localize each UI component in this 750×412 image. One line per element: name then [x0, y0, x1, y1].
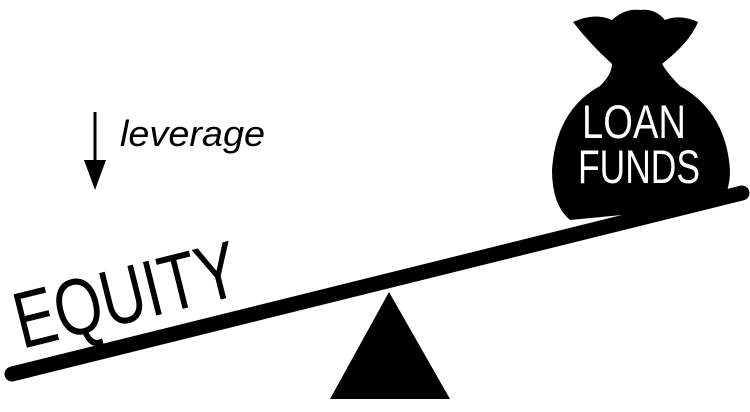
EQUITY label: EQUITY [5, 224, 247, 365]
fulcrum triangle [330, 292, 450, 399]
money bag with text: FUNDS [578, 140, 700, 193]
money bag with text: LOAN [582, 95, 686, 148]
seesaw beam [12, 193, 742, 374]
leverage label: leverage [120, 113, 265, 154]
money bag with text [552, 10, 730, 220]
icon: down arrow [84, 112, 106, 190]
